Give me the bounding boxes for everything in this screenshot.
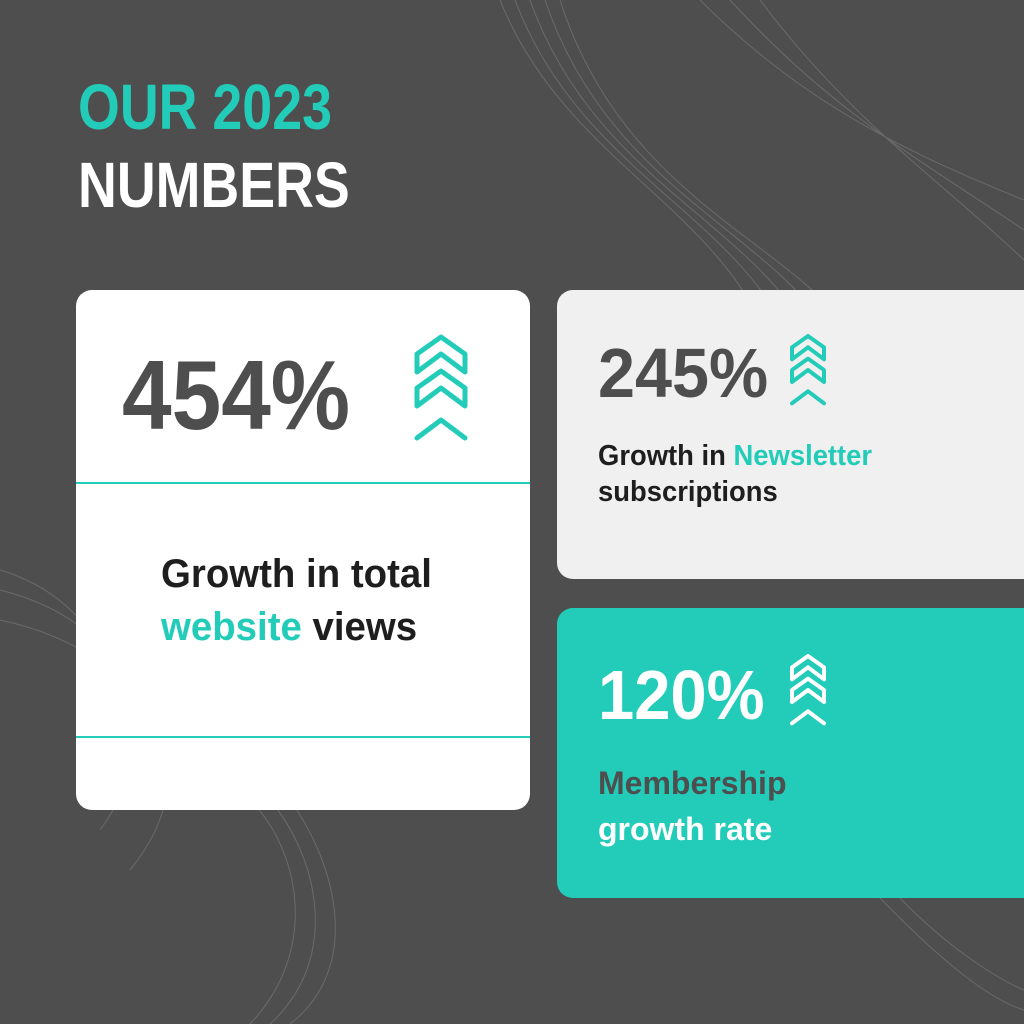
text: membership: growth rate [598,811,772,847]
text: membership: Membership [598,765,786,801]
icon: chevrons white [790,654,826,726]
panel: newsletter [557,290,1024,579]
title: NUMBERS [78,149,350,221]
number 454%: 454% [122,340,350,450]
icon: chevrons large [414,334,468,440]
panel: membership [557,608,1024,898]
title: OUR 2023 [78,71,332,143]
text: growth in total website views [160,552,432,649]
number 245%: 245% [598,334,768,412]
icon: chevrons [790,334,826,406]
text: membership [598,765,786,847]
number 120%: 120% [598,656,765,734]
text: growth in total website views: Growth in total [161,552,432,596]
text: newsletter [598,440,872,508]
title [78,71,350,221]
text: growth in total website views: website views [161,605,417,649]
text: newsletter: subscriptions [598,476,778,508]
panel: website views [76,290,530,810]
text: newsletter: Growth in Newsletter [598,440,872,472]
